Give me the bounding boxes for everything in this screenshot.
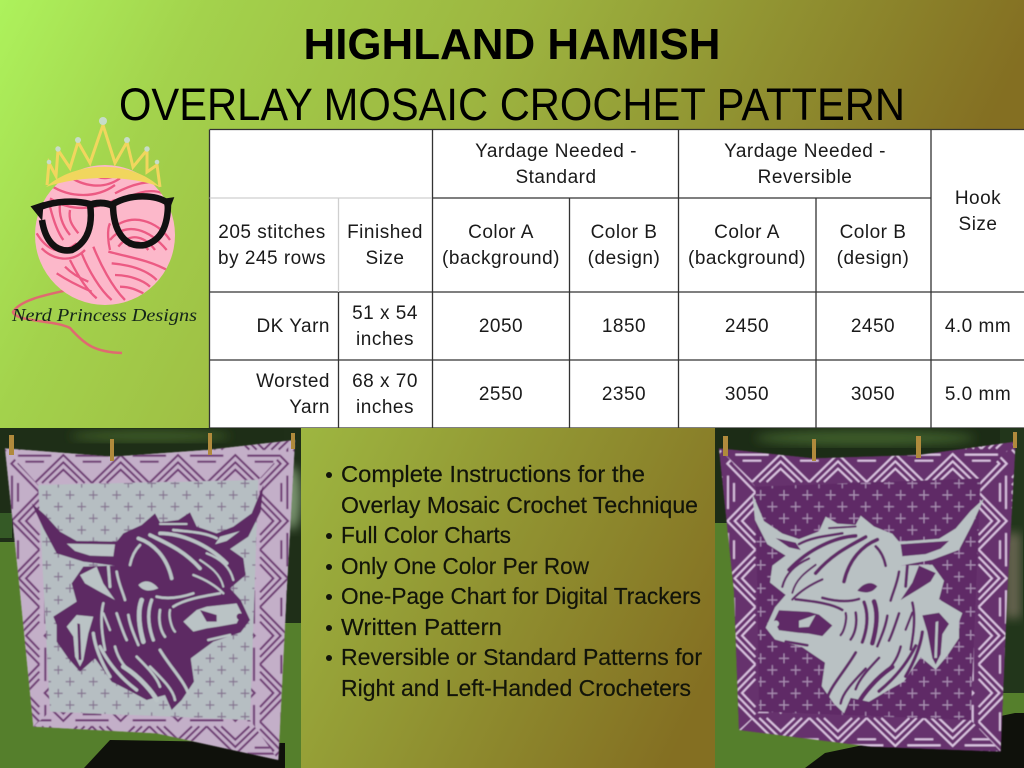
title: OVERLAY MOSAIC CROCHET PATTERN bbox=[119, 79, 905, 130]
yardage table bbox=[209, 129, 1024, 428]
photo: standard blanket bbox=[0, 428, 301, 768]
photo background bbox=[715, 428, 1024, 768]
photo background bbox=[0, 428, 301, 768]
bullet list: Written Pattern bbox=[341, 614, 502, 640]
table row: worsted yarn: 68 x 70 bbox=[352, 371, 418, 392]
clothespins bbox=[9, 433, 295, 461]
table row: worsted yarn: 3050 bbox=[851, 384, 895, 405]
table header: hook size: Hook bbox=[955, 188, 1001, 209]
table row: DK yarn: 2050 bbox=[479, 316, 523, 337]
icon: yarn ball bbox=[35, 165, 175, 305]
bullet list: Right and Left-Handed Crocheters bbox=[341, 675, 691, 701]
clothespins bbox=[723, 432, 1017, 461]
table row: DK yarn bbox=[256, 303, 1011, 350]
table header: stitches: 205 stitches bbox=[218, 222, 326, 243]
bullet list bbox=[326, 461, 702, 701]
blanket bbox=[719, 442, 1016, 752]
table header: finished size: Size bbox=[366, 248, 404, 269]
title: HIGHLAND HAMISH bbox=[304, 20, 720, 69]
table header: color A standard: (background) bbox=[442, 248, 560, 269]
table header: color B reversible: (design) bbox=[837, 248, 909, 269]
table row: worsted yarn: 3050 bbox=[725, 384, 769, 405]
table header: yardage standard: Yardage Needed - bbox=[475, 141, 637, 162]
bullet list: Overlay Mosaic Crochet Technique bbox=[341, 492, 698, 518]
bullet list: One-Page Chart for Digital Trackers bbox=[341, 583, 701, 609]
icon: crown bbox=[46, 117, 160, 187]
bullet list: Full Color Charts bbox=[341, 522, 511, 548]
table row: DK yarn: 4.0 mm bbox=[945, 316, 1011, 337]
table header: stitches: by 245 rows bbox=[218, 248, 326, 269]
table header: finished size: Finished bbox=[347, 222, 423, 243]
table header: color B standard: (design) bbox=[588, 248, 660, 269]
blanket bbox=[5, 440, 295, 760]
panel: feature list bbox=[301, 428, 715, 768]
icon: yarn tail bbox=[13, 290, 122, 353]
table header: yardage standard: Standard bbox=[515, 167, 597, 188]
table row: worsted yarn: 2350 bbox=[602, 384, 646, 405]
table header: color A reversible: (background) bbox=[688, 248, 806, 269]
table row: DK yarn: inches bbox=[356, 329, 414, 350]
table header: color B standard: Color B bbox=[591, 222, 657, 243]
table header: hook size: Size bbox=[959, 214, 997, 235]
logo: Nerd Princess Designs bbox=[11, 117, 197, 353]
table row: worsted yarn: Yarn bbox=[289, 397, 330, 418]
table row: DK yarn: DK Yarn bbox=[256, 316, 330, 337]
table header: color B reversible: Color B bbox=[840, 222, 906, 243]
table row: DK yarn: 1850 bbox=[602, 316, 646, 337]
logo text: Nerd Princess Designs bbox=[11, 305, 197, 325]
bullet list: Complete Instructions for the bbox=[341, 461, 645, 487]
table row: DK yarn: 2450 bbox=[725, 316, 769, 337]
table row: worsted yarn: inches bbox=[356, 397, 414, 418]
title bbox=[119, 20, 905, 130]
table header: yardage reversible: Yardage Needed - bbox=[724, 141, 886, 162]
bullet list: Only One Color Per Row bbox=[341, 553, 589, 579]
table header: color A standard: Color A bbox=[468, 222, 534, 243]
bullet list: Reversible or Standard Patterns for bbox=[341, 644, 702, 670]
table row: DK yarn: 51 x 54 bbox=[352, 303, 418, 324]
table header: color A reversible: Color A bbox=[714, 222, 780, 243]
table header: yardage reversible: Reversible bbox=[758, 167, 852, 188]
table row: worsted yarn: 5.0 mm bbox=[945, 384, 1011, 405]
table row: worsted yarn: Worsted bbox=[256, 371, 330, 392]
table row: worsted yarn bbox=[256, 371, 1011, 418]
photo: reversible blanket bbox=[715, 428, 1024, 768]
table row: DK yarn: 2450 bbox=[851, 316, 895, 337]
table row: worsted yarn: 2550 bbox=[479, 384, 523, 405]
icon: glasses bbox=[33, 196, 172, 250]
